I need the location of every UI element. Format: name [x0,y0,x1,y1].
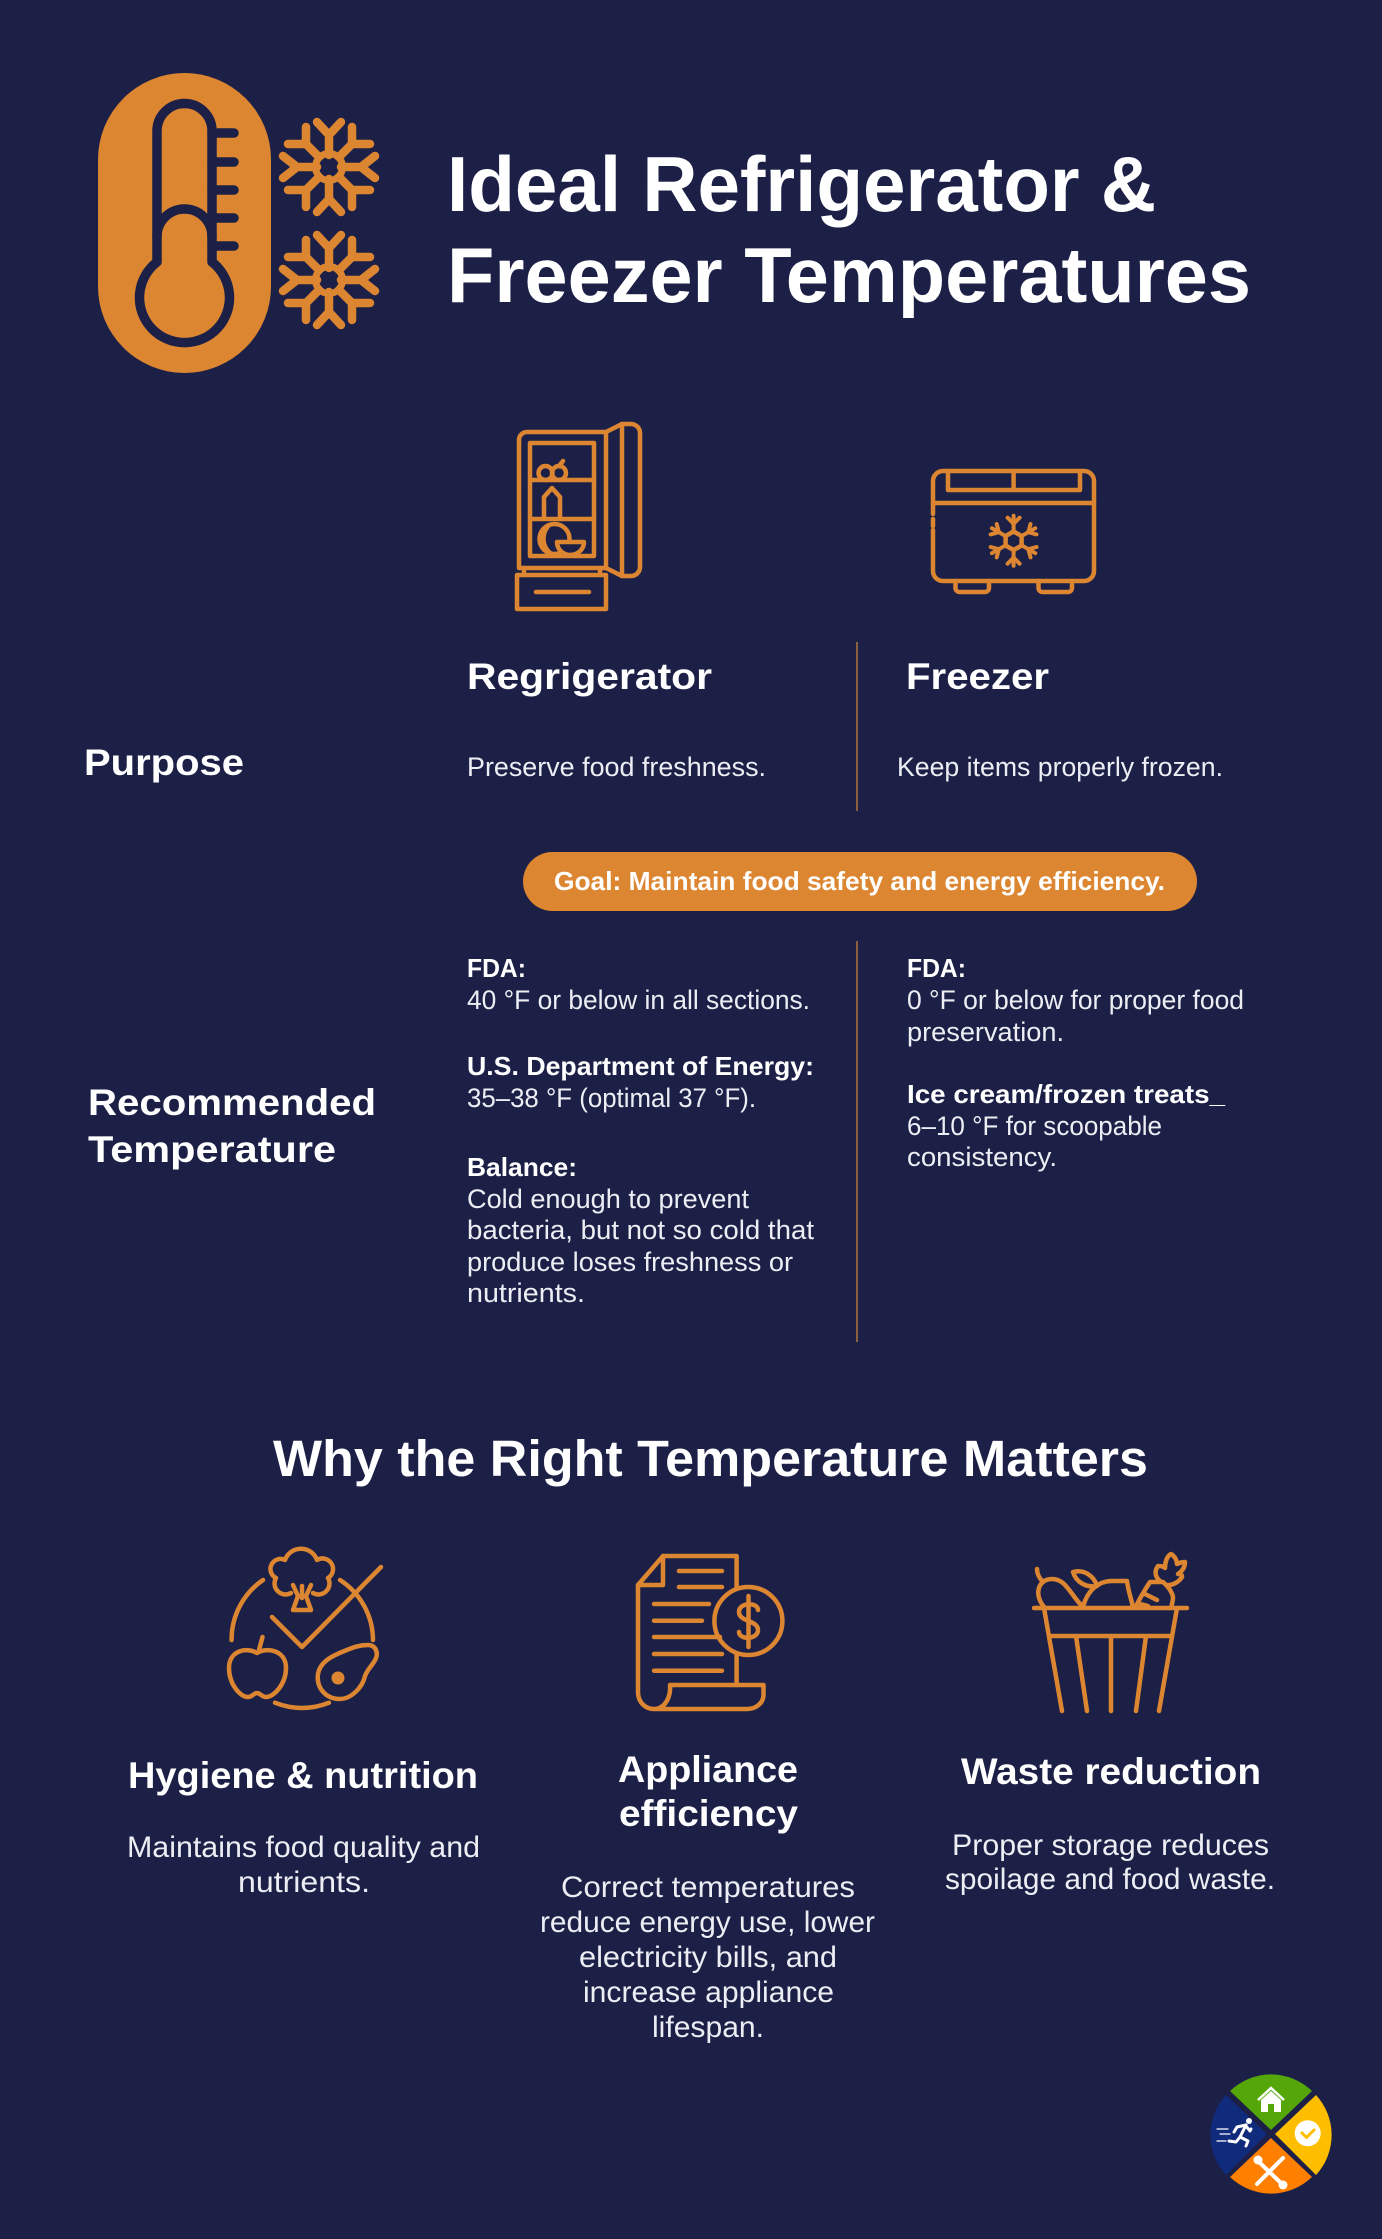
title: Freezer Temperatures [447,231,1251,319]
icon: snowflake bottom [283,235,375,325]
card: appliance efficiency: electricity bills, and [579,1941,837,1974]
header icon: thermometer and snowflakes [98,73,375,373]
icon: bill with dollar coin [638,1556,782,1709]
card: waste reduction [945,1751,1275,1896]
card: hygiene and nutrition: Hygiene & nutrition [128,1755,478,1796]
card: appliance efficiency: efficiency [619,1793,798,1834]
card: hygiene and nutrition: nutrients. [238,1866,370,1899]
card: appliance efficiency [540,1749,875,2044]
freezer recommendations: 0 °F or below for proper food [907,985,1244,1015]
row heading: recommended temperature: Temperature [88,1129,336,1170]
row heading: recommended temperature [88,1082,376,1170]
icon: snowflake top [283,122,375,212]
refrigerator recommendations: 40 °F or below in all sections. [467,985,810,1015]
refrigerator recommendations: nutrients. [467,1278,585,1308]
freezer recommendations: consistency. [907,1142,1057,1172]
refrigerator recommendations: Balance: [467,1152,577,1182]
refrigerator recommendations: Cold enough to prevent [467,1184,749,1214]
card: waste reduction: spoilage and food waste. [945,1863,1275,1896]
card: appliance efficiency: increase appliance [583,1976,834,2009]
title: Ideal Refrigerator & [447,140,1156,228]
icon: hygiene and nutrition [229,1549,381,1708]
card: appliance efficiency: reduce energy use, lower [540,1906,875,1939]
card: waste reduction: Waste reduction [961,1751,1261,1792]
refrigerator recommendations: produce loses freshness or [467,1247,793,1277]
goal pill callout: Goal: Maintain food safety and energy efficiency. [554,866,1165,896]
icon: refrigerator [517,424,640,609]
title [447,140,1251,319]
freezer recommendations: Ice cream/frozen treats_ [907,1079,1226,1109]
icon: thermometer badge [98,73,271,373]
row heading: recommended temperature: Recommended [88,1082,376,1123]
refrigerator recommendations: bacteria, but not so cold that [467,1215,815,1245]
freezer recommendations: 6–10 °F for scoopable [907,1111,1162,1141]
card: hygiene and nutrition [127,1755,480,1899]
card: appliance efficiency: Correct temperatures [561,1871,855,1904]
column heading: freezer: Freezer [906,656,1049,697]
column heading: refrigerator: Regrigerator [467,656,712,697]
freezer recommendations: FDA: [907,953,966,983]
logo: four-colour circle [1210,2074,1332,2194]
card: hygiene and nutrition: Maintains food quality and [127,1831,480,1864]
freezer recommendations: preservation. [907,1017,1064,1047]
refrigerator purpose text: Preserve food freshness. [467,752,766,782]
icon: basket of produce [1034,1554,1187,1711]
refrigerator recommendations: U.S. Department of Energy: [467,1051,814,1081]
refrigerator recommendations [467,953,815,1308]
row heading: purpose: Purpose [84,742,244,783]
section heading: why the right temperature matters: Why the Right Temperature Matters [273,1430,1148,1487]
refrigerator recommendations: 35–38 °F (optimal 37 °F). [467,1083,756,1113]
goal pill callout [523,852,1197,911]
card: appliance efficiency: Appliance [618,1749,798,1790]
icon: freezer [933,471,1094,592]
card: appliance efficiency: lifespan. [652,2011,764,2044]
card: waste reduction: Proper storage reduces [952,1829,1269,1862]
freezer recommendations [907,953,1244,1172]
refrigerator recommendations: FDA: [467,953,526,983]
freezer purpose text: Keep items properly frozen. [897,752,1223,782]
